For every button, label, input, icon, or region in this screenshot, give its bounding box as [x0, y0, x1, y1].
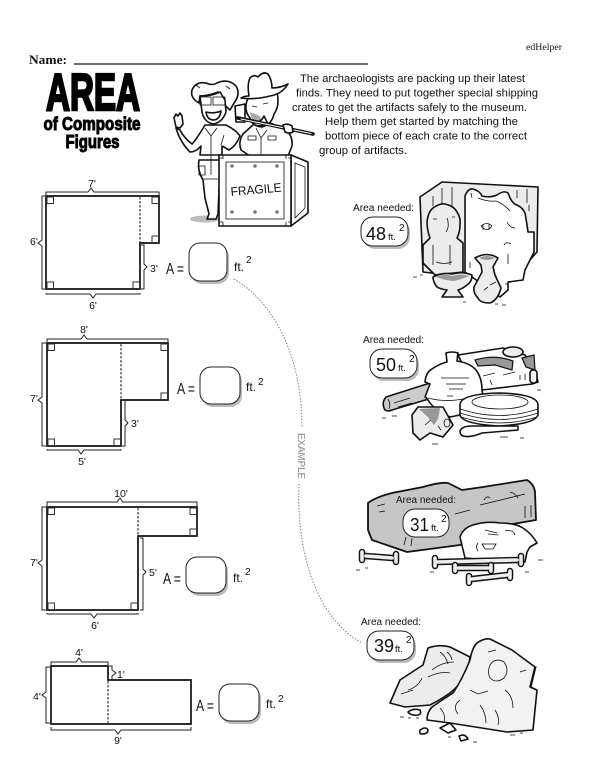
answer box 3: A =	[163, 571, 181, 588]
archaeologist: man	[235, 73, 313, 156]
answer box 1: A =	[166, 261, 184, 278]
figure 2: 7'	[30, 393, 38, 405]
crate: FRAGILE	[230, 181, 282, 199]
answer box 1: 2	[246, 255, 252, 266]
area needed label 2: 2	[409, 354, 415, 365]
intro text: finds. They need to put together special shipping	[296, 88, 538, 100]
left bone	[362, 552, 396, 562]
artifact group 1: stele, bust, bowl, vase	[413, 182, 538, 305]
answer box 4: 2	[278, 694, 284, 705]
title	[44, 64, 140, 152]
small bone	[455, 565, 491, 571]
artifact group 2: pot, roller, box, plates, rock, spoon	[382, 347, 541, 444]
example dotted connector	[234, 279, 362, 643]
answer box 4	[196, 684, 284, 724]
figure 1: 3'	[150, 263, 158, 275]
title: Figures	[66, 132, 120, 152]
figure 2: 8'	[80, 324, 88, 336]
example dotted connector: EXAMPLE	[295, 433, 306, 479]
figure 4: 4'	[33, 691, 41, 703]
brand label: edHelper	[526, 43, 563, 53]
figure 1	[30, 178, 159, 312]
area needed label 1: Area needed:	[353, 203, 414, 214]
answer box 3	[163, 557, 251, 596]
figure 3: 7'	[30, 557, 38, 569]
ground shadow	[190, 216, 220, 222]
answer box 4: A =	[196, 698, 214, 715]
area needed label 1	[353, 203, 414, 249]
intro text: group of artifacts.	[319, 145, 407, 157]
area needed label 2: Area needed:	[363, 335, 424, 346]
figure 2	[30, 324, 168, 468]
area needed label 2: 50	[376, 355, 396, 375]
area needed label 3: ft.	[431, 523, 439, 534]
area needed label 4	[361, 617, 421, 663]
figure 4: 1'	[117, 669, 125, 681]
answer box 2: ft.	[246, 380, 256, 394]
crate	[219, 155, 308, 226]
figure 3: 10'	[114, 488, 128, 500]
illustration: archaeologists with crate	[174, 73, 313, 226]
artifact group 4: carved rocks	[390, 639, 537, 742]
intro text: crates to get the artifacts safely to the museum.	[292, 102, 527, 114]
figure 3: 6'	[91, 620, 99, 632]
area needed label 3: 2	[441, 514, 447, 525]
name field: Name:	[29, 52, 67, 67]
figure 2: 3'	[131, 418, 139, 430]
figure 4: 9'	[114, 735, 122, 747]
intro text: Help them get started by matching the	[325, 116, 518, 128]
area needed label 4: 39	[374, 636, 394, 656]
area needed label 4: 2	[406, 635, 412, 646]
answer box 3: 2	[245, 567, 251, 578]
figure 3: 5'	[149, 567, 157, 579]
intro text: The archaeologists are packing up their latest	[300, 73, 525, 85]
area needed label 1: 48	[366, 224, 386, 244]
answer box 2	[177, 367, 264, 407]
figure 1: 6'	[89, 300, 97, 312]
intro text	[292, 73, 538, 157]
middle bone	[435, 556, 521, 566]
artifact group 3: stone tablet, skull, bones	[356, 480, 543, 583]
answer box 4: ft.	[266, 697, 276, 711]
area needed label 2	[363, 335, 424, 381]
figure 4	[33, 647, 191, 747]
area needed label 3: 31	[410, 515, 429, 535]
title: AREA	[46, 64, 140, 122]
figure 3	[30, 488, 197, 632]
area needed label 4: Area needed:	[361, 617, 421, 628]
figure 1: 6'	[30, 236, 38, 248]
answer box 1: ft.	[234, 260, 244, 274]
answer box 1	[166, 243, 252, 284]
area needed label 4: ft.	[395, 644, 403, 655]
answer box 2: A =	[177, 381, 195, 398]
area needed label 3	[396, 495, 456, 537]
archaeologist: woman	[174, 81, 240, 219]
answer box 3: ft.	[233, 571, 243, 585]
figure 4: 4'	[75, 647, 83, 659]
area needed label 2: ft.	[398, 363, 406, 374]
figure 2: 5'	[78, 456, 86, 468]
area needed label 3: Area needed:	[396, 495, 456, 506]
figure 1: 7'	[88, 178, 96, 190]
lower bone	[469, 571, 510, 583]
title: of Composite	[44, 114, 140, 134]
area needed label 1: 2	[399, 223, 405, 234]
intro text: bottom piece of each crate to the correct	[325, 130, 527, 142]
area needed label 1: ft.	[388, 232, 396, 243]
answer box 2: 2	[258, 377, 264, 388]
